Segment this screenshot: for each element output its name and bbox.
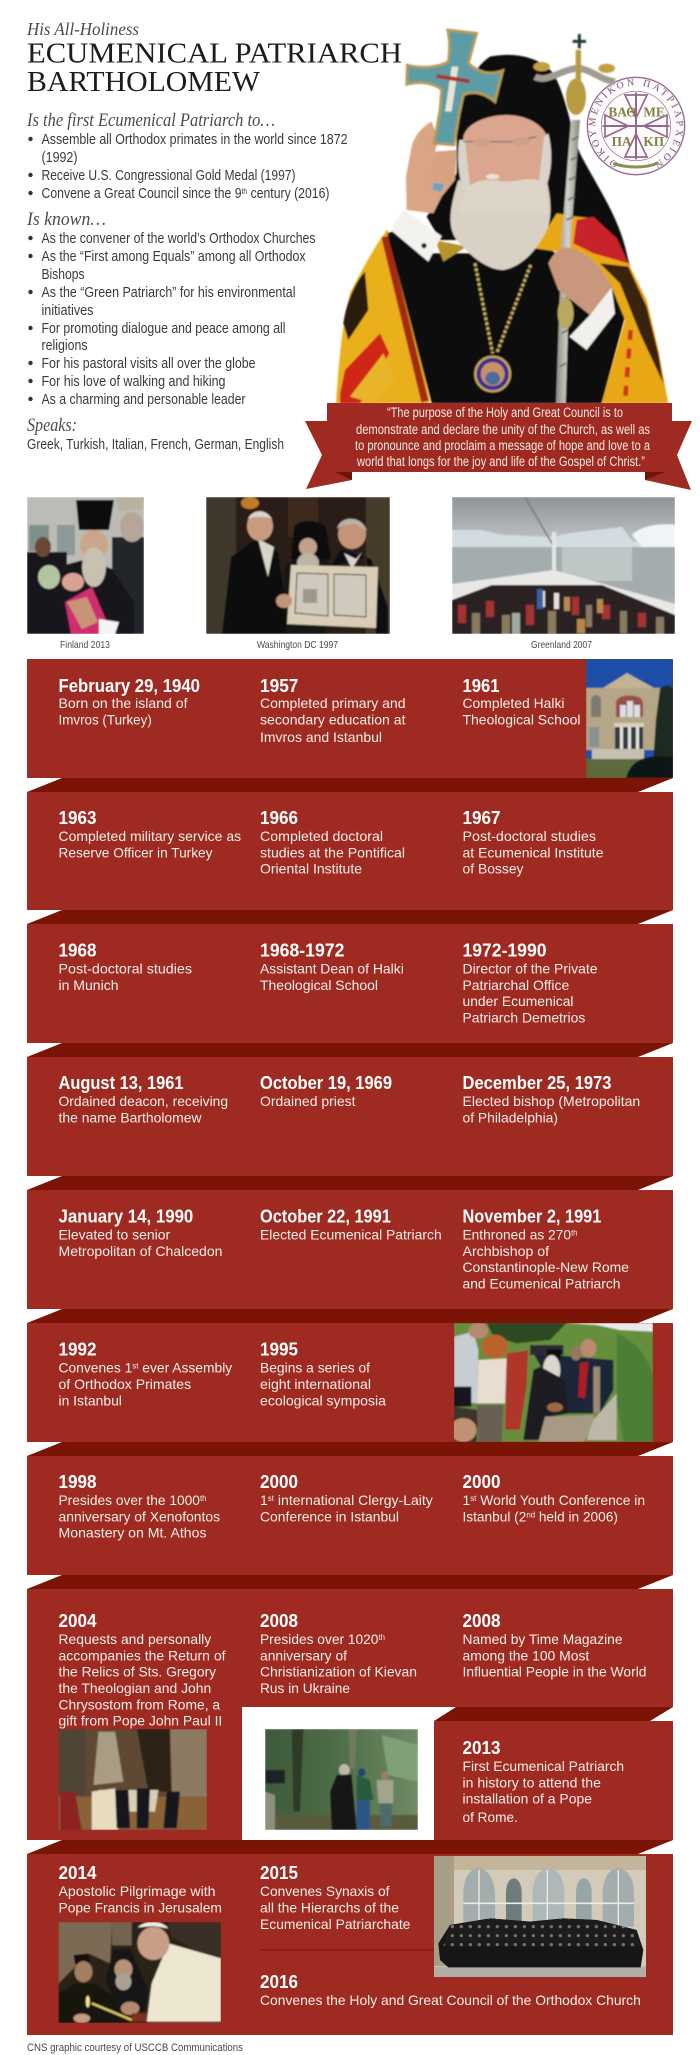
text block: is known: As the “First among Equals” among all Orthodox [42,249,306,265]
title: ECUMENICAL PATRIARCH [27,38,402,70]
event: 2013: 2013 [462,1738,500,1758]
photo: ecological symposium [454,1323,653,1442]
text block: speaks [27,415,284,453]
event: 1998: 1998 [58,1472,96,1492]
event: 1961: Theological School [462,712,580,728]
chain and panagia [475,263,531,353]
event: 2013: First Ecumenical Patriarch [462,1758,624,1774]
event: 2000 youth conference [462,1472,645,1524]
text block: is known: Is known… [26,209,106,230]
right vestment [535,213,668,403]
centre robe [387,230,625,403]
credit: CNS graphic courtesy of USCCB Communications [27,2042,243,2054]
text block: is the first to: (1992) [42,150,78,166]
veil and hat [427,55,630,267]
panel: 2004-2013 [27,1589,673,1840]
event: January 14, 1990: January 14, 1990 [58,1206,193,1226]
ribbon shape [305,403,692,490]
event: 2015 [260,1863,411,1932]
text block: is known: As a charming and personable leader [42,392,246,408]
event: 2000 youth conference: World Youth Conference in [476,1492,645,1508]
event: 2000 clergy-laity: 1 [260,1492,268,1508]
event: 2004: Requests and personally [58,1631,211,1647]
event: 1992: of Orthodox Primates [58,1376,191,1392]
event: 2015: 2015 [260,1863,298,1883]
event: August 13, 1961: the name Bartholomew [58,1109,202,1125]
event: 2014: 2014 [58,1863,96,1883]
panel: 1940-1961 [27,659,673,778]
icon: patriarchal seal: ΠΑ [612,134,632,149]
fold [27,910,673,924]
event: 2008 Kievan Rus: th [378,1633,385,1642]
event: 2004: 2004 [58,1611,96,1631]
text block: speaks: Greek, Turkish, Italian, French, German, English [27,437,284,453]
event: January 14, 1990 [58,1206,222,1259]
event: 1968 [58,940,192,993]
event: 1966: Oriental Institute [260,861,362,877]
text block: is the first to: Convene a Great Council since the 9 [42,186,278,202]
event: 1998: Monastery on Mt. Athos [58,1525,206,1541]
event: 1967: of Bossey [462,861,524,877]
event: October 22, 1991 [260,1206,442,1242]
text block: is known: religions [42,338,88,354]
caption: Finland 2013: Finland 2013 [60,639,110,651]
text block: is the first to: Is the first Ecumenical Patriarch to… [26,110,275,131]
event: 2008 Kievan Rus: Presides over 1020 [260,1631,381,1647]
event: 1957: Imvros and Istanbul [260,729,382,745]
icon: pastoral staff [556,120,580,403]
event: 1995: eight international [260,1376,371,1392]
event: 1961: 1961 [462,676,500,696]
event: August 13, 1961 [58,1073,228,1125]
event: 1961 [462,676,580,728]
text block: is the first to: Assemble all Orthodox primates in the world since 1872 [42,132,348,148]
portrait: Patriarch with cross and staff [335,28,686,403]
header: title block [26,19,402,98]
fold [27,1575,673,1589]
event: 2015: Convenes Synaxis of [260,1883,390,1899]
event: 1992: ever Assembly [138,1360,232,1376]
event: 2000 youth conference: st [470,1494,477,1503]
event: 2014 [58,1863,222,1915]
event: 1998 [58,1472,220,1541]
event: December 25, 1973: Elected bishop (Metropolitan [462,1093,640,1109]
event: 2016 [260,1972,641,2008]
icon: patriarchal seal: ΚΠ [643,134,665,149]
event: 1968-1972: 1968-1972 [260,940,344,960]
event: 2013: of Rome. [462,1809,518,1825]
event: 1963 [58,808,241,860]
event: 2014: Apostolic Pilgrimage with [58,1883,216,1899]
fold [27,1309,673,1323]
event: 1967: at Ecumenical Institute [462,844,604,860]
text block: is known: initiatives [42,303,94,319]
text block: is known: For his love of walking and hiking [42,374,226,390]
event: 1995: ecological symposia [260,1392,386,1408]
event: 2015: all the Hierarchs of the [260,1899,399,1915]
icon: patriarchal seal: ΟΙΚΟΥΜΕΝΙΚΟΝ ΠΑΤΡΙΑΡΧΕΙΟΝ [588,78,684,168]
event: 2016: Convenes the Holy and Great Council of the Orthodox Church [260,1992,641,2008]
event: 1957: Completed primary and [260,695,406,711]
event: January 14, 1990: Elevated to senior [58,1226,170,1242]
event: 1968: 1968 [58,940,96,960]
event: December 25, 1973 [462,1073,640,1125]
event: November 2, 1991: th [571,1228,578,1238]
event: 1972-1990: Director of the Private [462,960,598,976]
text block: is the first to [26,110,347,202]
event: 1992: st [132,1362,139,1370]
panel: ordinations [27,1057,673,1176]
fold [27,778,673,792]
event: 1992: 1992 [58,1340,96,1360]
event: 1967 [462,808,604,877]
event: 1995 [260,1340,386,1408]
ribbon folds [335,472,665,480]
photo: relics in Rome [58,1729,207,1830]
fold [27,1043,673,1057]
event: 1998: anniversary of Xenofontos [58,1508,220,1524]
event: 1957: 1957 [260,676,298,696]
event: 1966: 1966 [260,808,298,828]
event: 2004: the Theologian and John [58,1680,211,1696]
event: 2000 clergy-laity [260,1472,433,1524]
text block: is known [26,209,316,408]
event: February 29, 1940: February 29, 1940 [58,676,200,696]
event: 2004: gift from Pope John Paul II [58,1713,222,1729]
text block: is known: As the convener of the world’s Orthodox Churches [42,231,316,247]
event: 1963: Reserve Officer in Turkey [58,844,212,860]
text block: is the first to: century (2016) [247,186,330,202]
fold [27,1840,673,1854]
event: 2000 youth conference: held in 2006) [535,1508,618,1524]
event: 2014: Pope Francis in Jerusalem [58,1899,222,1915]
event: 2008 Kievan Rus: anniversary of [260,1647,347,1663]
event: February 29, 1940 [58,676,200,728]
fold: right [434,1707,673,1721]
event: 2000 youth conference: Istanbul (2 [462,1508,528,1524]
event: February 29, 1940: Born on the island of [58,695,188,711]
panel: 2014-2016 [27,1854,673,2035]
event: 2004: the Relics of Sts. Gregory [58,1664,216,1680]
event: 1967: Post-doctoral studies [462,828,596,844]
event: October 19, 1969: October 19, 1969 [260,1073,392,1093]
event: 2000 clergy-laity: st [268,1494,275,1503]
event: November 2, 1991: November 2, 1991 [462,1206,601,1226]
event: 2008 Time Magazine: Named by Time Magazine [462,1631,623,1647]
title [27,38,402,98]
event: October 19, 1969 [260,1073,392,1109]
quote text [355,405,650,469]
event: 2008 Time Magazine: among the 100 Most [462,1647,589,1663]
event: 2000 clergy-laity: Conference in Istanbul [260,1508,399,1524]
photo: Synaxis of hierarchs [434,1856,646,1977]
icon: blessing cross [407,30,503,145]
text block: is the first to: Receive U.S. Congressional Gold Medal (1997) [42,168,296,184]
event: November 2, 1991: Enthroned as 270 [462,1226,573,1242]
event: 1972-1990: Patriarchal Office [462,977,569,993]
event: 2008 Time Magazine: 2008 [462,1611,500,1631]
event: 2000 youth conference: 2000 [462,1472,500,1492]
event: 1967: 1967 [462,808,500,828]
event: November 2, 1991: and Ecumenical Patriarch [462,1275,620,1291]
event: 1963: Completed military service as [58,828,241,844]
event: October 22, 1991: October 22, 1991 [260,1206,391,1226]
event: November 2, 1991: Archbishop of [462,1243,549,1259]
event: 1968-1972: Assistant Dean of Halki [260,960,404,976]
photo: with Pope Francis [58,1922,221,2023]
event: 2008 Kievan Rus: Christianization of Kievan [260,1664,417,1680]
event: November 2, 1991: Constantinople-New Rome [462,1259,629,1275]
text block: is known: Bishops [42,267,84,283]
event: 1961: Completed Halki [462,695,564,711]
photo: Greenland 2007 [452,497,675,634]
icon: patriarchal seal: ΒΑΘ [608,105,636,120]
event: 2016: 2016 [260,1972,298,1992]
event: 1972-1990: 1972-1990 [462,940,546,960]
icon: patriarchal seal: ΜΕ [643,105,665,120]
event: 2004: Chrysostom from Rome, a [58,1696,220,1712]
left vestment [336,229,431,403]
event: 1992: Convenes 1 [58,1360,133,1376]
event: 1972-1990 [462,940,598,1025]
quote text: “The purpose of the Holy and Great Council is to [387,405,623,420]
event: 1995: 1995 [260,1340,298,1360]
panel: 1990-1991 [27,1190,673,1309]
event: 2008 Kievan Rus [260,1611,417,1696]
photo: Washington DC 1997 [206,497,390,634]
event: 2013 [434,1721,673,1840]
event: 2008 Time Magazine [462,1611,646,1680]
caption: Greenland 2007: Greenland 2007 [531,639,592,651]
event: 1992 [58,1340,232,1408]
raised hand and cuff [406,122,457,213]
event: 1968-1972 [260,940,404,993]
event: 2013: in history to attend the [462,1774,601,1790]
event: 1972-1990: under Ecumenical [462,993,574,1009]
event: October 22, 1991: Elected Ecumenical Patriarch [260,1226,442,1242]
event: 2004: accompanies the Return of [58,1647,226,1663]
event: 1995: Begins a series of [260,1360,370,1376]
text block: is the first to: th [242,187,247,196]
event: 1966 [260,808,405,877]
photo: Halki Theological School [586,659,673,778]
event: 2015: Ecumenical Patriarchate [260,1916,411,1932]
subtitle: His All-Holiness [26,19,139,39]
event: 2004 [58,1611,226,1729]
event: 1972-1990: Patriarch Demetrios [462,1009,585,1025]
photo: Finland 2013 [27,497,144,634]
text block: is known: For promoting dialogue and peace among all [42,321,286,337]
event: 1998: Presides over the 1000 [58,1492,202,1508]
event: 1957 [260,676,406,745]
supporting hand and cuff [548,248,612,315]
panel: 1998-2000 [27,1456,673,1575]
text block: is known: As the “Green Patriarch” for his environmental [42,285,296,301]
event: 2008 Time Magazine: Influential People in the World [462,1664,646,1680]
event: 1957: secondary education at [260,712,406,728]
caption: Washington DC 1997: Washington DC 1997 [257,639,338,651]
event: 1966: studies at the Pontifical [260,844,405,860]
event: December 25, 1973: December 25, 1973 [462,1073,612,1093]
event: August 13, 1961: August 13, 1961 [58,1073,184,1093]
event: 1968: in Munich [58,977,118,993]
event: 1992: in Istanbul [58,1392,122,1408]
quote text: world that longs for the joy and life of the Gospel of Christ.” [356,454,645,469]
panel: 1968-1990 [27,924,673,1043]
beard and face [450,173,550,270]
event: 1968-1972: Theological School [260,977,378,993]
event: 2000 youth conference: nd [526,1510,535,1519]
panel: 1963-1967 [27,792,673,910]
event: August 13, 1961: Ordained deacon, receiving [58,1093,228,1109]
event: December 25, 1973: of Philadelphia) [462,1109,558,1125]
event: November 2, 1991 [462,1206,629,1291]
text block: is known: For his pastoral visits all over the globe [42,356,256,372]
white gap and photo: walking in forest [242,1707,434,1840]
event: 2000 clergy-laity: 2000 [260,1472,298,1492]
event: 1968: Post-doctoral studies [58,960,192,976]
panel: 1992-1995 [27,1323,673,1442]
event: 2000 clergy-laity: international Clergy-Laity [274,1492,433,1508]
title: BARTHOLOMEW [27,67,261,98]
text block: speaks: Speaks: [27,415,77,436]
quote ribbon [305,403,692,490]
event: 1998: th [200,1494,206,1503]
event: January 14, 1990: Metropolitan of Chalcedon [58,1243,222,1259]
event: 2000 youth conference: 1 [462,1492,470,1508]
fold [27,1176,673,1190]
event: 2013: installation of a Pope [462,1791,592,1807]
event: February 29, 1940: Imvros (Turkey) [58,712,152,728]
event: 1963: 1963 [58,808,96,828]
event: 2008 Kievan Rus: 2008 [260,1611,298,1631]
fold [27,1442,673,1456]
event: 1966: Completed doctoral [260,828,383,844]
event: October 19, 1969: Ordained priest [260,1093,356,1109]
event: 2008 Kievan Rus: Rus in Ukraine [260,1680,350,1696]
